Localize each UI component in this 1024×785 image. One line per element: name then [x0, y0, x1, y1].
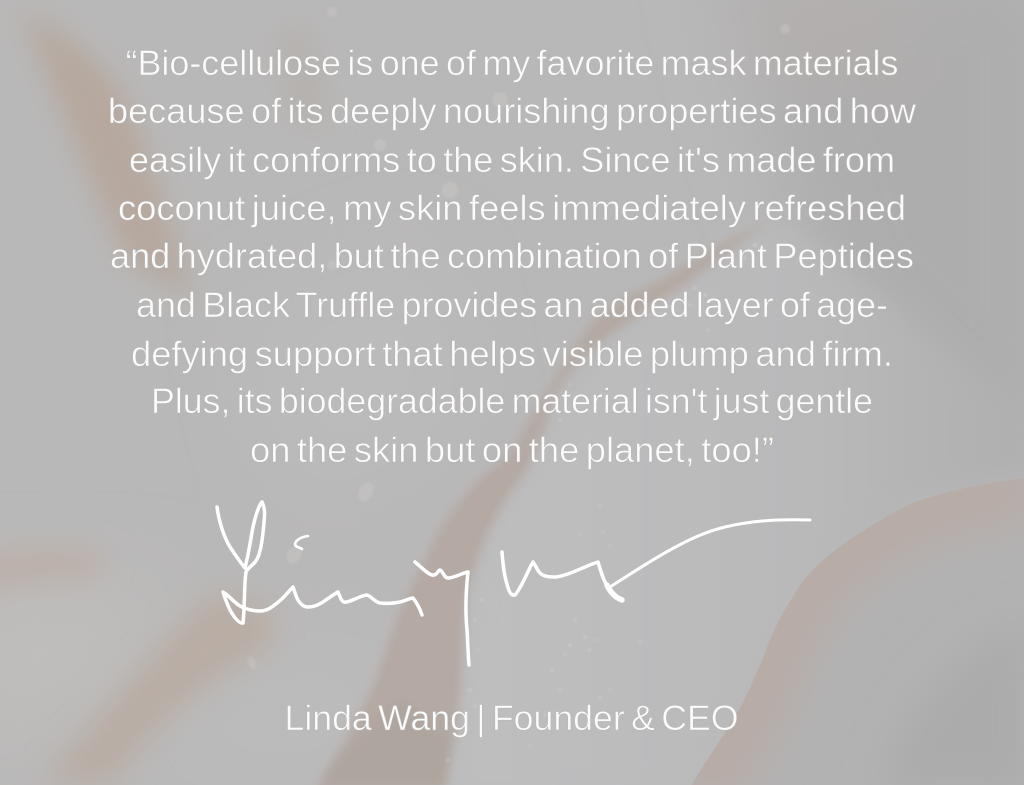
speckles — [447, 244, 761, 761]
quote text: “Bio-cellulose is one of my favorite mask materials — [126, 44, 898, 83]
quote text: coconut juice, my skin feels immediately refreshed — [118, 189, 906, 228]
quote text: defying support that helps visible plump and firm. — [131, 335, 893, 374]
signature — [217, 502, 810, 665]
quote text — [108, 44, 917, 470]
quote text: and hydrated, but the combination of Plant Peptides — [110, 237, 914, 276]
quote text: Plus, its biodegradable material isn't just gentle — [151, 382, 873, 421]
peach band — [316, 222, 770, 785]
quote text: on the skin but on the planet, too!” — [250, 431, 774, 470]
attribution: Linda Wang | Founder & CEO — [284, 699, 738, 738]
silver fold — [445, 215, 1024, 785]
quote text: because of its deeply nourishing properties and how — [108, 92, 917, 131]
lower right fold — [680, 470, 1024, 785]
quote text: and Black Truffle provides an added layer of age- — [136, 286, 888, 325]
bokeh spots — [246, 7, 790, 671]
quote text: easily it conforms to the skin. Since it's made from — [129, 141, 895, 180]
